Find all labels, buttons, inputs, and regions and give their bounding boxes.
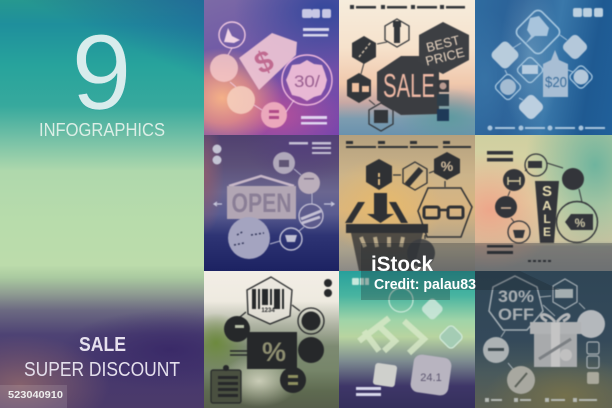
icon: outlined diamond right <box>568 64 594 90</box>
icon: outlined circle top-left <box>219 22 245 48</box>
icon: filled gear bottom <box>507 366 535 394</box>
icon: filled gear left <box>483 337 509 363</box>
icon: dark circle left <box>224 316 250 342</box>
icon: large light card: 24.1 <box>420 372 442 384</box>
image id badge <box>0 385 67 408</box>
icon: gear circle <box>298 308 324 334</box>
infographics label: INFOGRAPHICS <box>39 120 165 140</box>
text lines bottom <box>301 116 327 124</box>
text lines top left <box>487 151 513 162</box>
small icon stack <box>587 342 599 384</box>
panel: scattered discount infographic <box>339 271 475 408</box>
big numeral nine: 9 <box>72 12 132 132</box>
icon: outlined diamond left lower <box>494 73 522 101</box>
small icon stack <box>437 80 449 121</box>
icon: filled circle bottom <box>261 102 287 128</box>
text lines top right <box>289 142 331 154</box>
image id badge: 523040910 <box>8 389 63 401</box>
icon: down arrow <box>367 193 394 223</box>
icon: dark hexagon percent: % <box>441 158 454 174</box>
connectors <box>393 170 445 239</box>
super discount subtitle: SUPER DISCOUNT <box>24 359 180 381</box>
sale hexagon: SALE <box>383 67 435 104</box>
panel: basket and glasses infographic <box>339 135 475 271</box>
basket <box>345 202 428 271</box>
gift box <box>530 315 581 367</box>
icon: large outlined diamond <box>514 8 562 56</box>
panel: shopping diamond infographic <box>475 0 612 135</box>
legend row bottom <box>488 126 605 130</box>
icon: outlined circle cart <box>280 228 302 250</box>
panel: price tag infographic <box>204 0 339 135</box>
icon: clipboard checklist <box>211 365 241 403</box>
legend row bottom <box>485 398 597 402</box>
best price hexagon: PRICE <box>424 44 466 69</box>
price tag $20: $20 <box>545 74 567 91</box>
icon: dark circle left <box>495 196 517 218</box>
panel: gift 30 percent off infographic <box>475 271 612 408</box>
vertical sale banner: L <box>543 212 551 226</box>
icon: filled gear right <box>577 310 605 338</box>
icon: outlined hexagon <box>553 279 577 309</box>
icon: outlined hexagon flashlight <box>385 19 409 47</box>
icon: outlined circle <box>525 154 547 176</box>
icon: outlined hexagon gift <box>369 103 393 131</box>
tag circle: % <box>575 216 586 230</box>
icon: dark circle bed <box>503 169 525 191</box>
icon: filled circle lower <box>227 86 255 114</box>
icon: filled circle top <box>273 152 295 174</box>
icon row top right <box>573 8 603 17</box>
small icons top left <box>352 278 369 285</box>
icon: dark circle right <box>562 168 584 190</box>
connectors <box>361 42 419 105</box>
connectors <box>501 296 585 369</box>
icon: outlined bottle <box>403 162 427 190</box>
panel: open sign infographic <box>204 135 339 271</box>
connectors <box>508 163 582 222</box>
icon: big circle <box>228 217 270 259</box>
panel: barcode discount infographic <box>204 271 339 408</box>
30 percent off heptagon <box>489 276 543 330</box>
icon: glasses in octagon <box>418 188 472 237</box>
icon: outlined circle pattern <box>299 204 323 228</box>
icon: dark circle bottom <box>280 367 306 393</box>
icon: light card bottom <box>373 363 397 387</box>
text lines <box>356 387 381 396</box>
connectors <box>240 305 300 317</box>
open sign: OPEN <box>232 188 292 218</box>
icon: dark hexagon boxes <box>347 73 371 103</box>
barcode hexagon: 1234 <box>261 308 275 314</box>
arrow right <box>324 202 334 206</box>
icons top right <box>324 279 332 297</box>
icon: outlined diamond right <box>438 324 464 350</box>
column headers <box>346 141 471 148</box>
30 percent off heptagon: 30% <box>498 287 534 306</box>
arrow left <box>214 202 222 206</box>
price tag: $ <box>250 44 279 81</box>
connectors <box>270 169 312 244</box>
connector lines <box>228 48 294 112</box>
icon: light diamond top <box>420 297 444 321</box>
legend tabs <box>350 5 465 9</box>
icon: filled diamond left <box>489 39 521 71</box>
best price hexagon <box>419 22 469 74</box>
icon: outlined diamond center <box>516 56 544 84</box>
best price hexagon: BEST <box>425 32 461 55</box>
icon: hanging sign roof <box>229 176 294 186</box>
watermark: credit: Credit: palau83 <box>374 277 476 293</box>
icon: dark hexagon pen <box>352 36 376 64</box>
discount badge: 30/ <box>294 72 320 91</box>
icon: outlined circle basket <box>508 221 530 243</box>
panel: sale tag infographic <box>475 135 612 271</box>
icon row top right <box>302 9 331 18</box>
icon: filled diamond bottom <box>517 93 545 121</box>
pagination dots <box>528 260 551 262</box>
icons top left <box>212 144 222 164</box>
icon: dark hexagon <box>366 159 392 190</box>
vertical sale banner: S <box>542 183 552 200</box>
text lines bottom left <box>487 245 513 254</box>
sale heading: SALE <box>79 333 126 356</box>
text lines top <box>303 28 329 36</box>
icon: filled circle right <box>298 172 320 194</box>
vertical sale banner: A <box>542 198 552 213</box>
vertical sale banner <box>535 181 559 243</box>
30 percent off heptagon: OFF <box>498 305 534 324</box>
icon: outlined top circle <box>389 288 413 312</box>
icon: percent chevrons <box>359 318 424 353</box>
connectors <box>505 35 573 100</box>
watermark: iStock: iStock <box>371 252 433 276</box>
icon: filled diamond right <box>561 33 589 61</box>
icon: bottom dark circle <box>407 239 435 267</box>
panel: best price sale infographic <box>339 0 475 135</box>
percent card: % <box>262 337 286 367</box>
icon: dark circle right <box>298 337 324 363</box>
vertical sale banner: E <box>543 225 551 239</box>
panel: cover <box>0 0 204 408</box>
icon: filled circle left <box>210 54 238 82</box>
